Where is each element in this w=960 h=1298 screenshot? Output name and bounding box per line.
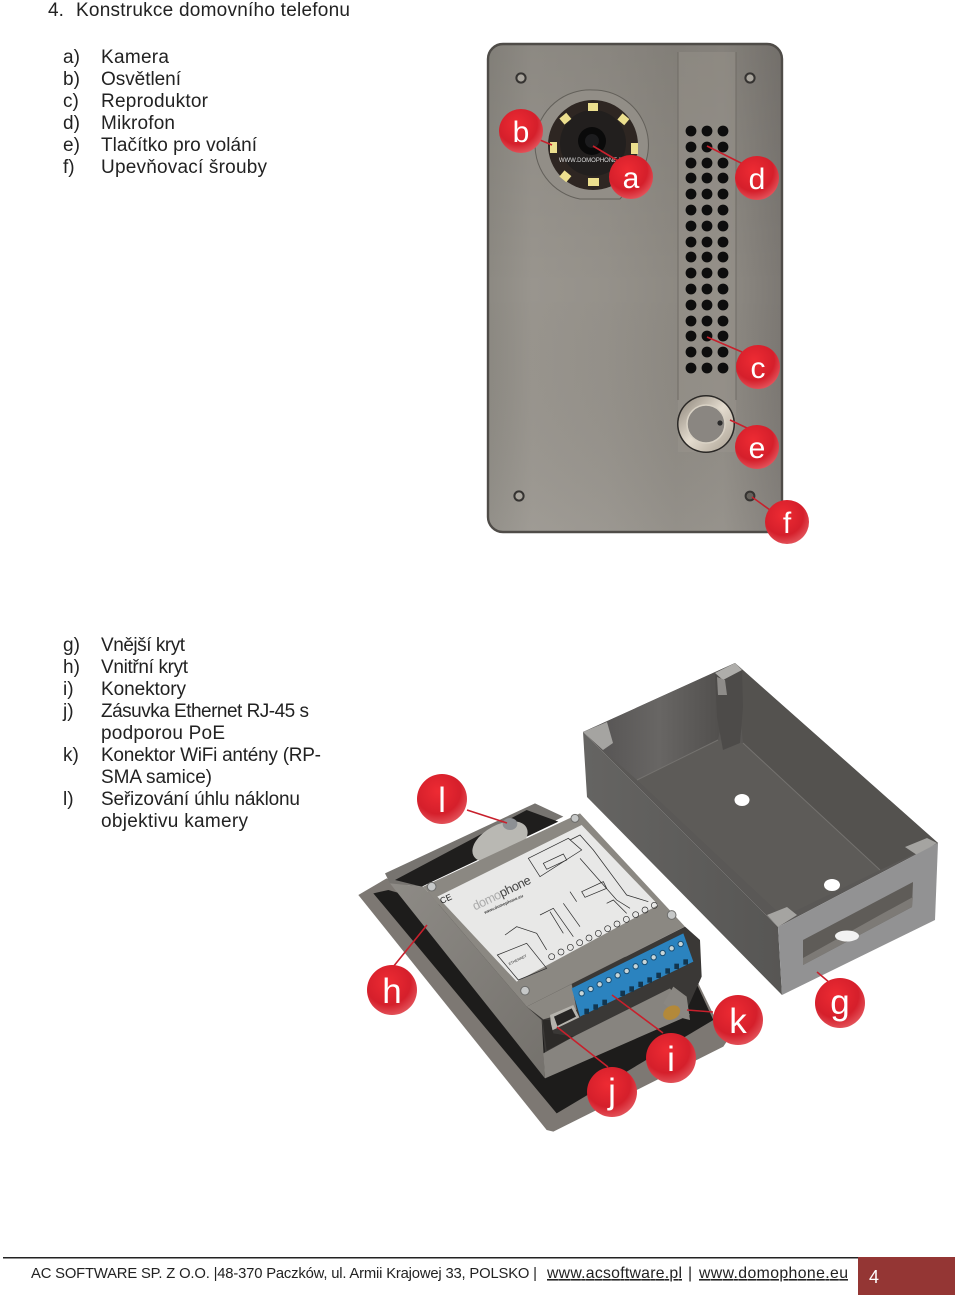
callout e: e — [749, 432, 765, 465]
panel plate — [488, 44, 782, 532]
callout l — [417, 774, 467, 824]
text block: housing parts list: Vnitřní kryt — [101, 657, 189, 678]
text block: front panel parts list: c) — [63, 91, 79, 112]
leader lines — [393, 810, 830, 1067]
outer cover — [583, 663, 938, 995]
terminal block — [572, 933, 693, 1017]
text block: front panel parts list: Reproduktor — [101, 91, 209, 112]
wiring label: CE — [438, 892, 454, 906]
callout a — [609, 155, 653, 199]
photo: opened housing — [358, 663, 938, 1132]
heading: Konstrukce domovního telefonu — [76, 0, 350, 21]
separator: | — [688, 1265, 692, 1282]
camera module: WWW.DOMOPHONE.EU — [559, 158, 627, 164]
callout e — [735, 425, 779, 469]
text block: housing parts list: i) — [63, 679, 74, 700]
callout i: i — [667, 1040, 675, 1079]
callout i — [646, 1033, 696, 1083]
callout j: j — [607, 1072, 616, 1111]
callout h: h — [382, 972, 402, 1011]
front opening — [527, 927, 702, 1053]
gray flange — [527, 984, 577, 1019]
leader lines — [540, 140, 770, 510]
text block: housing parts list: g) — [63, 635, 80, 656]
callout b — [499, 109, 543, 153]
antenna connector — [661, 987, 690, 1023]
callout b: b — [513, 116, 529, 149]
side wall — [390, 883, 545, 1078]
callout f: f — [783, 507, 792, 540]
lid screws — [427, 814, 676, 995]
text block: front panel parts list: d) — [63, 113, 80, 134]
text block: front panel parts list: Kamera — [101, 47, 169, 68]
text block: front panel parts list: a) — [63, 47, 80, 68]
callout g — [815, 978, 865, 1028]
callout k: k — [729, 1002, 747, 1041]
text block: front panel parts list: e) — [63, 135, 80, 156]
callout j — [587, 1067, 637, 1117]
text block: housing parts list: l) — [63, 789, 74, 810]
text block: housing parts list: k) — [63, 745, 79, 766]
callout c — [736, 345, 780, 389]
text block: front panel parts list: b) — [63, 69, 80, 90]
callout g: g — [830, 983, 850, 1022]
page number box — [858, 1257, 955, 1295]
text block: housing parts list: SMA samice) — [101, 767, 212, 788]
callout c: c — [750, 352, 766, 385]
text block: front panel parts list: Osvětlení — [101, 69, 182, 90]
text block: front panel parts list: Tlačítko pro volání — [101, 135, 258, 156]
callout k — [713, 995, 763, 1045]
text block: front panel parts list: f) — [63, 157, 75, 178]
callout d: d — [749, 163, 765, 196]
link: acsoftware: www.acsoftware.pl — [546, 1265, 682, 1282]
ethernet socket — [543, 1005, 579, 1051]
link: domophone: www.domophone.eu — [698, 1265, 848, 1282]
text block: housing parts list: Zásuvka Ethernet RJ-45 s — [101, 701, 309, 722]
text block: housing parts list: Konektor WiFi antény (RP- — [101, 745, 321, 766]
callout h — [367, 965, 417, 1015]
lens bay — [385, 803, 563, 887]
photo: front panel of door phone — [488, 44, 809, 544]
text block: front panel parts list: Upevňovací šrouby — [101, 157, 268, 178]
wiring label — [437, 825, 658, 982]
speaker strip — [678, 52, 736, 452]
text block: housing parts list: podporou PoE — [101, 723, 225, 744]
gasket — [373, 890, 713, 1113]
screws — [514, 73, 755, 501]
lower front wall — [543, 988, 690, 1078]
camera module — [535, 90, 648, 199]
company address: AC SOFTWARE SP. Z O.O. |48-370 Paczków, ul. Armii Krajowej 33, POLSKO | — [31, 1266, 537, 1282]
callout a: a — [623, 162, 640, 195]
text block: housing parts list: Seřizování úhlu náklonu — [101, 789, 300, 810]
callout d — [735, 156, 779, 200]
call button — [677, 395, 735, 453]
text block: housing parts list: objektivu kamery — [101, 811, 248, 832]
base plate — [358, 878, 727, 1132]
callout f — [765, 500, 809, 544]
text block: front panel parts list: Mikrofon — [101, 113, 175, 134]
text block: housing parts list — [62, 635, 321, 832]
text block: housing parts list: h) — [63, 657, 80, 678]
wiring label: domophone — [470, 873, 533, 913]
callout l: l — [438, 781, 446, 820]
wiring label: www.domophone.eu — [482, 893, 524, 915]
heading: 4. — [48, 0, 64, 21]
lid — [423, 813, 685, 1007]
footer — [3, 1257, 955, 1295]
microphone and speaker holes — [686, 126, 728, 373]
text block: housing parts list: j) — [62, 701, 74, 722]
text block: housing parts list: Konektory — [101, 679, 186, 700]
wiring label: ETHERNET — [508, 954, 528, 966]
text block: housing parts list: Vnější kryt — [101, 635, 186, 656]
inner housing — [358, 803, 727, 1132]
page number box: 4 — [869, 1267, 879, 1287]
text block: front panel parts list — [63, 47, 268, 178]
